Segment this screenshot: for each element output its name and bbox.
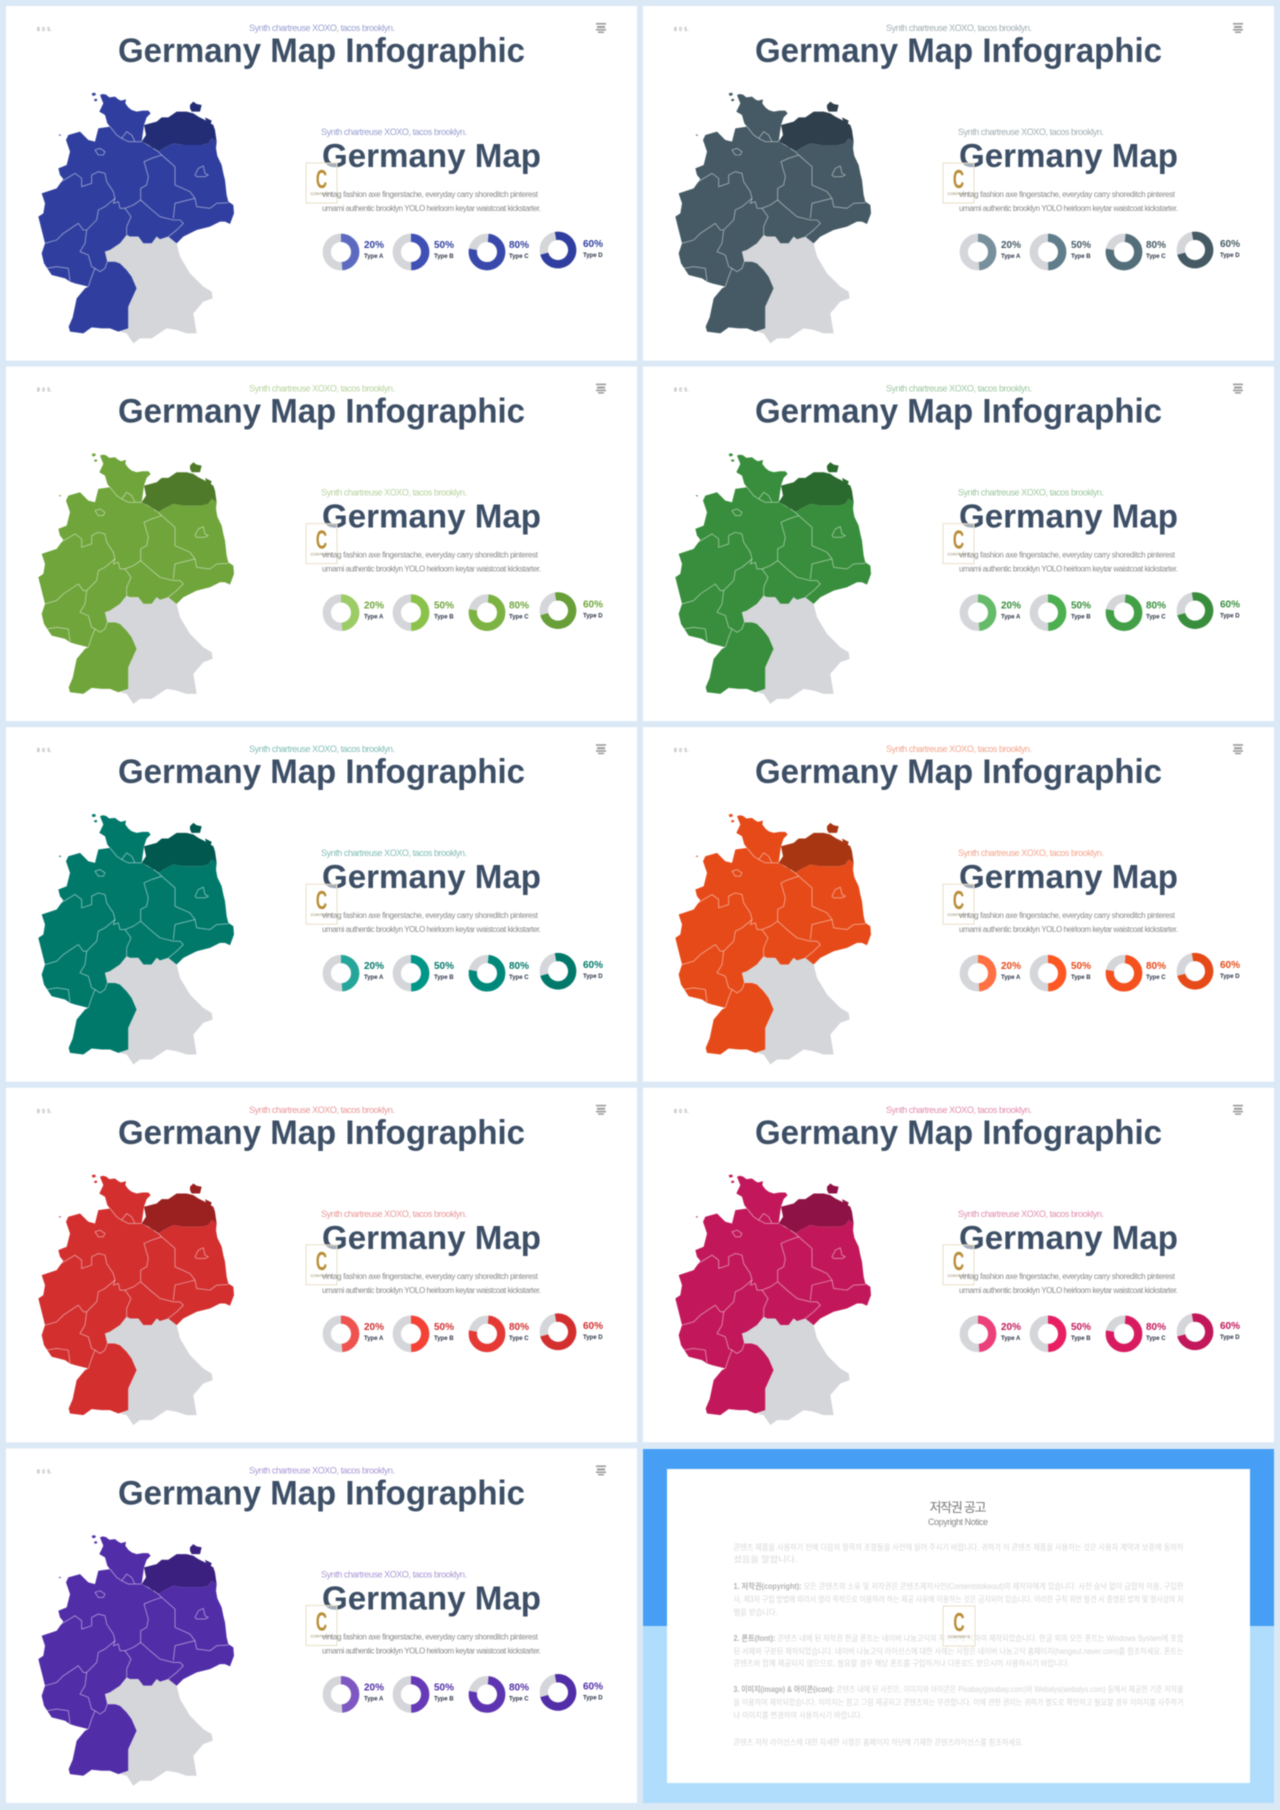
- map: Germany: [38, 93, 234, 343]
- donut chart: Type B: 50%: [434, 1322, 454, 1333]
- text block: description: vintag fashion axe fingerstache, everyday carry shoreditch pinterest: [959, 551, 1176, 560]
- icon: watermark: [306, 884, 337, 924]
- text block: description: [959, 551, 1178, 574]
- donut chart: Type D: [542, 594, 603, 627]
- icon: menu: [1233, 23, 1243, 33]
- donut chart: Type A: 20%: [364, 961, 384, 972]
- map: Germany: [38, 1174, 234, 1425]
- donut chart: Type B: Type B: [1071, 254, 1091, 260]
- donut chart: Type D: 60%: [1220, 1321, 1240, 1332]
- map: Germany: [38, 1535, 234, 1786]
- title: Germany Map Infographic: [755, 753, 1162, 791]
- icon: watermark: CONTENTS: [310, 912, 333, 917]
- donut chart: Type A: Type A: [364, 975, 384, 981]
- donut chart: Type D: Type D: [583, 253, 603, 259]
- donut chart: Type D: 60%: [1220, 960, 1240, 971]
- subtitle: Synth chartreuse XOXO, tacos brooklyn.: [249, 384, 395, 394]
- icon: watermark: CONTENTS: [948, 552, 970, 557]
- icon: watermark: C: [953, 1608, 965, 1637]
- donut chart: Type A: [327, 1680, 384, 1709]
- text block: description: vintag fashion axe fingerstache, everyday carry shoreditch pinterest: [322, 190, 539, 199]
- donut chart: Type D: Type D: [583, 974, 603, 980]
- text block: description: [322, 190, 541, 213]
- donut chart: Type D: 60%: [1220, 600, 1240, 611]
- donut chart: Type B: 50%: [1071, 1322, 1091, 1333]
- icon: watermark: CONTENTS: [310, 552, 333, 557]
- donut chart: Type A: Type A: [1001, 254, 1021, 260]
- heading: Germany Map: [959, 498, 1178, 535]
- icon: watermark: [943, 524, 974, 564]
- text block: description: [959, 911, 1178, 934]
- panel: green: [643, 367, 1274, 721]
- icon: menu: [1233, 744, 1243, 754]
- panel: green: 8 0 5.: [674, 388, 689, 394]
- donut chart: Type C: 80%: [1146, 961, 1166, 972]
- donut chart: Type A: 20%: [1001, 240, 1021, 251]
- heading: Germany Map: [322, 498, 541, 535]
- icon: menu: [596, 744, 606, 754]
- icon: watermark: C: [316, 1247, 327, 1276]
- donut chart: Type D: [1179, 594, 1240, 627]
- donut chart: Type B: 50%: [434, 1682, 454, 1693]
- donut chart: Type B: 50%: [1071, 961, 1091, 972]
- panel: indigo: 8 0 5.: [37, 27, 52, 33]
- icon: watermark: CONTENTS: [310, 1273, 333, 1278]
- text: tagline: Synth chartreuse XOXO, tacos brooklyn.: [958, 848, 1104, 858]
- icon: watermark: C: [953, 1247, 964, 1276]
- map: Germany: [38, 453, 234, 704]
- text block: notice body: 사, 제3자 구입 방법에 따라서 영리 목적으로 이용하려 하는 제공 사유에 이용하는 것은 금지되어 있습니다. 이러한 규칙 위반 발견 시 증명된 법적 및 형사상의 처: [734, 1594, 1184, 1604]
- text block: notice body: 벌을 받습니다.: [734, 1607, 778, 1617]
- icon: watermark: C: [316, 526, 327, 555]
- icon: menu: [596, 384, 606, 394]
- subtitle: Synth chartreuse XOXO, tacos brooklyn.: [249, 1465, 395, 1475]
- donut chart: Type B: Type B: [434, 975, 454, 981]
- donut chart: Type D: 60%: [583, 1681, 603, 1692]
- donut chart: Type D: Type D: [583, 614, 603, 620]
- donut chart: Type A: 20%: [364, 240, 384, 251]
- panel: slate: [643, 6, 1274, 360]
- text block: description: umami authentic brooklyn YOLO heirloom keytar waistcoat kickstarter.: [322, 565, 541, 574]
- title: Germany Map Infographic: [118, 1474, 525, 1512]
- subtitle: Synth chartreuse XOXO, tacos brooklyn.: [886, 384, 1032, 394]
- text: tagline: Synth chartreuse XOXO, tacos brooklyn.: [321, 488, 467, 498]
- icon: menu: [596, 23, 606, 33]
- subtitle: Synth chartreuse XOXO, tacos brooklyn.: [249, 23, 395, 33]
- title: Germany Map Infographic: [755, 393, 1162, 431]
- panel: orange: 8 0 5.: [674, 748, 689, 754]
- icon: watermark: [306, 1605, 337, 1645]
- icon: watermark: [306, 524, 337, 564]
- donut chart: Type C: 80%: [509, 961, 529, 972]
- donut chart: Type C: [472, 958, 529, 989]
- donut chart: Type D: [1179, 1315, 1240, 1348]
- text: tagline: Synth chartreuse XOXO, tacos brooklyn.: [958, 127, 1104, 137]
- donut chart: Type C: 80%: [509, 601, 529, 612]
- text block: notice body: 콘텐츠 저작 라이선스에 대한 자세한 사항은 홈페이지 하단에 기재한 콘텐츠라이선스를 참조하세요.: [734, 1737, 1024, 1747]
- map: Germany: [675, 1174, 871, 1425]
- heading: copyright: 저작권 공고: [930, 1500, 987, 1515]
- title: Germany Map Infographic: [755, 1114, 1162, 1152]
- heading: Germany Map: [322, 137, 541, 174]
- donut chart: Type D: [1179, 955, 1240, 988]
- text: tagline: Synth chartreuse XOXO, tacos brooklyn.: [321, 1209, 467, 1219]
- text block: description: umami authentic brooklyn YOLO heirloom keytar waistcoat kickstarter.: [322, 204, 541, 213]
- donut chart: Type B: [397, 238, 454, 266]
- donut chart: Type C: [472, 1318, 529, 1349]
- donut chart: Type D: Type D: [1220, 614, 1240, 620]
- panel: slate: 8 0 5.: [674, 27, 689, 33]
- donut chart: Type C: Type C: [509, 1696, 529, 1702]
- map: Germany: [675, 93, 871, 343]
- map: Germany: [38, 814, 234, 1065]
- text block: notice body: [734, 1542, 1184, 1747]
- donut chart: Type B: [397, 959, 454, 987]
- donut chart: Type A: [964, 598, 1021, 627]
- donut chart: Type B: Type B: [434, 615, 454, 621]
- donut chart: Type B: [1034, 238, 1091, 266]
- donut chart: Type B: Type B: [1071, 975, 1091, 981]
- donut chart: Type C: Type C: [1146, 615, 1166, 621]
- donut chart: Type A: Type A: [364, 254, 384, 260]
- panel: indigo: [6, 6, 637, 360]
- text block: description: vintag fashion axe fingerstache, everyday carry shoreditch pinterest: [959, 911, 1176, 920]
- donut chart: Type D: 60%: [1220, 239, 1240, 250]
- icon: menu: [596, 1105, 606, 1115]
- icon: watermark: CONTENTS: [948, 1634, 970, 1639]
- icon: watermark: CONTENTS: [310, 191, 333, 196]
- donut chart: Type B: Type B: [1071, 1336, 1091, 1342]
- text: tagline: Synth chartreuse XOXO, tacos brooklyn.: [321, 127, 467, 137]
- map: Germany: [675, 814, 871, 1065]
- heading: Germany Map: [322, 1219, 541, 1256]
- text block: notice body: 2. 폰트(font): 콘텐츠 내에 된 저작권 한글 폰트는 네이버 나눔고딕의 저작권에 의하여 제작되었습니다. 한글 외의 모든 폰트는 Windows System에 포함: [734, 1633, 1184, 1643]
- panel: pink: 8 0 5.: [674, 1109, 689, 1115]
- donut chart: Type B: Type B: [434, 1336, 454, 1342]
- donut chart: Type C: [472, 237, 529, 267]
- text block: description: umami authentic brooklyn YOLO heirloom keytar waistcoat kickstarter.: [959, 925, 1178, 934]
- icon: watermark: C: [953, 165, 964, 194]
- donut chart: Type C: [472, 597, 529, 628]
- donut chart: Type B: 50%: [434, 601, 454, 612]
- donut chart: Type D: 60%: [583, 960, 603, 971]
- donut chart: Type C: 80%: [509, 240, 529, 251]
- donut chart: Type C: 80%: [1146, 1322, 1166, 1333]
- heading: Germany Map: [322, 1579, 541, 1616]
- icon: watermark: C: [316, 886, 327, 915]
- donut chart: Type C: [1109, 597, 1166, 628]
- heading: Germany Map: [959, 1219, 1178, 1256]
- icon: watermark: C: [953, 526, 964, 555]
- panel: copyright notice: [643, 1449, 1274, 1803]
- donut chart: Type B: Type B: [434, 254, 454, 260]
- subtitle: Synth chartreuse XOXO, tacos brooklyn.: [249, 744, 395, 754]
- donut chart: Type B: 50%: [1071, 601, 1091, 612]
- text block: notice body: 나 이미지를 변경하여 사용하시기 바랍니다.: [734, 1710, 862, 1720]
- icon: watermark: [306, 1245, 337, 1285]
- text block: notice body: 1. 저작권(copyright): 모든 콘텐츠의 소유 및 저작권은 콘텐츠제작사인(Contentstokeout)의 제작자에게 있습니다. 사전 승낙 없이 급합적 이용, 구입한: [734, 1581, 1184, 1591]
- text: tagline: Synth chartreuse XOXO, tacos brooklyn.: [321, 1569, 467, 1579]
- icon: watermark: [943, 163, 974, 203]
- donut chart: Type A: Type A: [364, 1336, 384, 1342]
- text block: description: [322, 1632, 541, 1655]
- donut chart: Type B: Type B: [434, 1696, 454, 1702]
- icon: menu: [596, 1465, 606, 1475]
- donut chart: Type A: 20%: [364, 601, 384, 612]
- heading: Germany Map: [959, 858, 1178, 895]
- donut chart: Type D: [542, 1315, 603, 1348]
- text: tagline: Synth chartreuse XOXO, tacos brooklyn.: [958, 1209, 1104, 1219]
- donut chart: Type C: Type C: [509, 615, 529, 621]
- text block: notice body: 3. 이미지(image) & 아이콘(icon): 콘텐츠 내에 된 사진은, 이미지와 아이콘은 Pixabay(pixabay.com)와 Webalys(webalys.com) 등에서 제공한 기준 저작물: [734, 1684, 1184, 1694]
- icon: watermark: [943, 884, 974, 924]
- text block: notice body: 콘텐츠 제품을 사용하기 전에 다음의 항목의 조항들을 사전에 읽어 주시기 바랍니다. 귀하가 이 콘텐츠 제품을 사용하는 것은 사용자 계약과 보증에 동의하: [734, 1542, 1184, 1552]
- donut chart: Type C: [1109, 1318, 1166, 1349]
- text block: description: vintag fashion axe fingerstache, everyday carry shoreditch pinterest: [322, 1272, 539, 1281]
- text block: description: [322, 551, 541, 574]
- icon: watermark: C: [953, 886, 964, 915]
- text block: description: [959, 190, 1178, 213]
- donut chart: Type C: [472, 1679, 529, 1710]
- donut chart: Type A: Type A: [1001, 615, 1021, 621]
- donut chart: Type D: [542, 955, 603, 988]
- title: Germany Map Infographic: [755, 32, 1162, 70]
- donut chart: Type B: [397, 1320, 454, 1348]
- text: tagline: Synth chartreuse XOXO, tacos brooklyn.: [321, 848, 467, 858]
- donut chart: Type C: [1109, 237, 1166, 267]
- icon: watermark: [306, 163, 337, 203]
- donut chart: Type A: 20%: [1001, 961, 1021, 972]
- subtitle: Synth chartreuse XOXO, tacos brooklyn.: [886, 744, 1032, 754]
- text block: description: [322, 1272, 541, 1295]
- donut chart: Type A: Type A: [364, 615, 384, 621]
- map: Germany: [675, 453, 871, 704]
- icon: watermark: [943, 1245, 974, 1285]
- text block: description: umami authentic brooklyn YOLO heirloom keytar waistcoat kickstarter.: [322, 1646, 541, 1655]
- donut chart: Type B: [1034, 598, 1091, 627]
- panel: orange: [643, 727, 1274, 1082]
- panel: red: 8 0 5.: [37, 1109, 52, 1115]
- panel: teal: [6, 727, 637, 1082]
- donut chart: Type D: [1179, 234, 1240, 266]
- donut chart: Type A: Type A: [1001, 1336, 1021, 1342]
- icon: watermark: CONTENTS: [948, 1273, 970, 1278]
- donut chart: Type A: 20%: [1001, 1322, 1021, 1333]
- text block: description: umami authentic brooklyn YOLO heirloom keytar waistcoat kickstarter.: [959, 1286, 1178, 1295]
- donut chart: Type A: [964, 1320, 1021, 1348]
- icon: menu: [1233, 1105, 1243, 1115]
- donut chart: Type B: 50%: [434, 240, 454, 251]
- donut chart: Type C: Type C: [509, 975, 529, 981]
- text block: description: vintag fashion axe fingerstache, everyday carry shoreditch pinterest: [959, 190, 1176, 199]
- donut chart: Type A: [327, 598, 384, 627]
- donut chart: Type A: 20%: [364, 1682, 384, 1693]
- text block: description: vintag fashion axe fingerstache, everyday carry shoreditch pinterest: [959, 1272, 1176, 1281]
- icon: watermark: CONTENTS: [948, 912, 970, 917]
- panel: teal: 8 0 5.: [37, 748, 52, 754]
- icon: watermark: [943, 1606, 975, 1646]
- donut chart: Type C: Type C: [509, 254, 529, 260]
- donut chart: Type D: Type D: [583, 1695, 603, 1701]
- subtitle: Synth chartreuse XOXO, tacos brooklyn.: [886, 1105, 1032, 1115]
- donut chart: Type B: 50%: [1071, 240, 1091, 251]
- icon: watermark: C: [316, 1607, 327, 1636]
- panel: purple: 8 0 5.: [37, 1469, 52, 1475]
- icon: watermark: C: [316, 165, 327, 194]
- title: Germany Map Infographic: [118, 1114, 525, 1152]
- donut chart: Type D: Type D: [1220, 253, 1240, 259]
- text block: description: vintag fashion axe fingerstache, everyday carry shoreditch pinterest: [322, 551, 539, 560]
- text block: notice body: 을 이용하여 제작되었습니다. 이미지는 참고 그림 제공되고 콘텐츠와는 무관합니다. 이에 관한 권리는 귀하가 별도로 확인하고 필요할 경우 이미지를 사주하거: [734, 1697, 1184, 1707]
- subheading: copyright notice: Copyright Notice: [928, 1517, 988, 1527]
- icon: menu: [1233, 384, 1243, 394]
- heading: Germany Map: [322, 858, 541, 895]
- donut chart: Type A: Type A: [364, 1696, 384, 1702]
- title: Germany Map Infographic: [118, 32, 525, 70]
- text block: description: [322, 911, 541, 934]
- panel: red: [6, 1088, 637, 1442]
- donut chart: Type D: 60%: [583, 1321, 603, 1332]
- title: Germany Map Infographic: [118, 753, 525, 791]
- donut chart: Type C: 80%: [1146, 240, 1166, 251]
- text block: description: umami authentic brooklyn YOLO heirloom keytar waistcoat kickstarter.: [322, 925, 541, 934]
- donut chart: Type B: 50%: [434, 961, 454, 972]
- donut chart: Type A: Type A: [1001, 975, 1021, 981]
- text block: description: [959, 1272, 1178, 1295]
- donut chart: Type D: Type D: [1220, 1335, 1240, 1341]
- donut chart: Type A: [964, 959, 1021, 987]
- donut chart: Type D: Type D: [1220, 974, 1240, 980]
- donut chart: Type A: 20%: [1001, 601, 1021, 612]
- donut chart: Type A: [327, 1320, 384, 1348]
- text block: notice body: 셨음을 말합니다.: [734, 1554, 798, 1564]
- donut chart: Type D: Type D: [583, 1335, 603, 1341]
- donut chart: Type C: Type C: [1146, 975, 1166, 981]
- title: Germany Map Infographic: [118, 393, 525, 431]
- donut chart: Type A: [964, 238, 1021, 266]
- panel: purple: [6, 1448, 637, 1803]
- heading: Germany Map: [959, 137, 1178, 174]
- donut chart: Type B: [1034, 959, 1091, 987]
- donut chart: Type B: [1034, 1320, 1091, 1348]
- icon: watermark: CONTENTS: [948, 191, 970, 196]
- donut chart: Type A: 20%: [364, 1322, 384, 1333]
- donut chart: Type C: 80%: [509, 1322, 529, 1333]
- subtitle: Synth chartreuse XOXO, tacos brooklyn.: [249, 1105, 395, 1115]
- donut chart: Type A: [327, 959, 384, 987]
- panel: light green: 8 0 5.: [37, 388, 52, 394]
- panel: pink: [643, 1088, 1274, 1442]
- text block: description: vintag fashion axe fingerstache, everyday carry shoreditch pinterest: [322, 911, 539, 920]
- donut chart: Type C: [1109, 958, 1166, 989]
- donut chart: Type B: Type B: [1071, 615, 1091, 621]
- donut chart: Type D: 60%: [583, 600, 603, 611]
- donut chart: Type D: 60%: [583, 239, 603, 250]
- subtitle: Synth chartreuse XOXO, tacos brooklyn.: [886, 23, 1032, 33]
- panel: light green: [6, 367, 637, 721]
- donut chart: Type B: [397, 1680, 454, 1709]
- text block: description: umami authentic brooklyn YOLO heirloom keytar waistcoat kickstarter.: [322, 1286, 541, 1295]
- donut chart: Type D: [542, 234, 603, 266]
- text block: notice body: 된 서체와 구분된 제작되었습니다. 네이버 나눔고딕 라이선스에 대한 사례는 사항은 네이버 나눔고딕 홈페이지(hangeul.naver.com)를 참조하세요. 폰트는: [734, 1646, 1184, 1656]
- donut chart: Type C: 80%: [1146, 601, 1166, 612]
- text: tagline: Synth chartreuse XOXO, tacos brooklyn.: [958, 488, 1104, 498]
- donut chart: Type A: [327, 238, 384, 266]
- text block: description: vintag fashion axe fingerstache, everyday carry shoreditch pinterest: [322, 1632, 539, 1641]
- text block: description: umami authentic brooklyn YOLO heirloom keytar waistcoat kickstarter.: [959, 565, 1178, 574]
- donut chart: Type B: [397, 598, 454, 627]
- donut chart: Type C: Type C: [1146, 1336, 1166, 1342]
- donut chart: Type C: Type C: [509, 1336, 529, 1342]
- text block: notice body: 콘텐츠와 함께 제공되지 않으므로, 필요할 경우 해당 폰트를 구입하거나 다운로드 받으시어 사용하시기 바랍니다.: [734, 1658, 1070, 1668]
- donut chart: Type C: 80%: [509, 1682, 529, 1693]
- donut chart: Type C: Type C: [1146, 254, 1166, 260]
- text block: description: umami authentic brooklyn YOLO heirloom keytar waistcoat kickstarter.: [959, 204, 1178, 213]
- donut chart: Type D: [542, 1676, 603, 1709]
- icon: watermark: CONTENTS: [310, 1633, 333, 1638]
